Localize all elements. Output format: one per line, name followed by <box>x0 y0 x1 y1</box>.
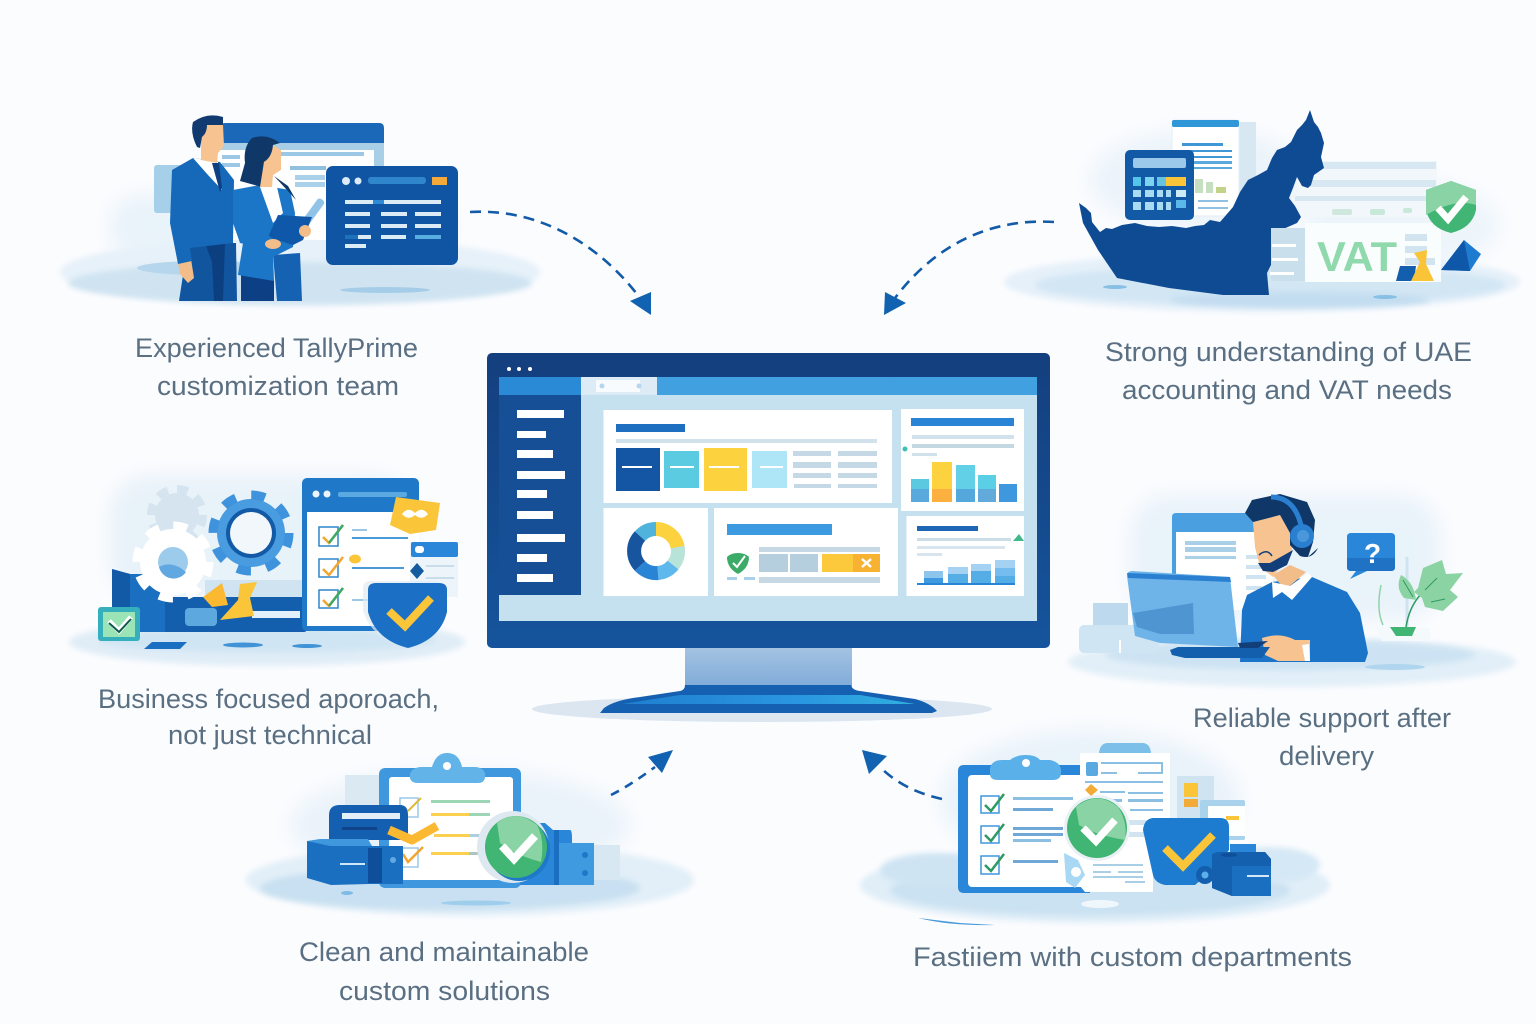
caption: clean <box>299 937 589 1006</box>
monitor frame <box>487 353 1050 648</box>
icon: green check circle <box>477 811 550 883</box>
icon: yellow shards <box>203 582 257 620</box>
wash: departments ground <box>860 730 1330 925</box>
icon: faded document <box>1295 161 1437 217</box>
icon: right storage boxes <box>520 823 594 885</box>
icon: white gear <box>137 526 209 598</box>
icon: businesswoman <box>233 136 325 301</box>
caption: UAE: Strong understanding of UAE <box>1105 337 1472 367</box>
arrow: UAE to monitor <box>884 222 1054 315</box>
icon: question bubble: ? <box>1364 538 1381 569</box>
caption: team <box>135 333 418 401</box>
panel: reliable support <box>1068 494 1516 687</box>
caption: team: customization team <box>157 371 399 401</box>
sidebar <box>499 395 581 595</box>
icon: report sheet <box>1172 120 1256 216</box>
caption: support <box>1193 703 1451 771</box>
icon: check badge <box>1143 818 1229 885</box>
caption: clean: custom solutions <box>339 976 550 1006</box>
icon: blue gem <box>1441 240 1481 271</box>
icon: yellow tag <box>390 497 440 534</box>
panel: business focused <box>69 475 465 666</box>
arrow: team to monitor <box>470 212 651 315</box>
title bar <box>499 377 1037 395</box>
icon: left printer stack <box>307 805 408 885</box>
caption: UAE: accounting and VAT needs <box>1122 375 1452 405</box>
wash: clean ground <box>246 770 694 916</box>
screen <box>499 377 1037 621</box>
desk bar <box>160 597 307 632</box>
icon: plant <box>1375 557 1463 641</box>
icon: UAE map <box>1079 110 1324 295</box>
caption: departments: Fastiiem with custom departments <box>913 942 1352 972</box>
icon: shield <box>363 581 447 648</box>
panel: UAE VAT <box>1004 110 1520 312</box>
icon: dashboard card <box>326 166 458 265</box>
panel: clean solutions <box>246 753 694 916</box>
stand neck <box>685 647 852 687</box>
caption: team: Experienced TallyPrime <box>135 333 418 363</box>
icon: green check circle <box>1064 795 1130 861</box>
card: KPI tiles <box>604 410 892 503</box>
icon: side boxes <box>1079 603 1159 653</box>
arrow: departments to monitor <box>862 750 942 799</box>
caption: business <box>98 684 439 750</box>
window dots <box>507 367 532 371</box>
caption: business: Business focused aporoach, <box>98 684 439 714</box>
icon: clipboard <box>379 753 521 888</box>
icon: checklist clipboard <box>958 755 1090 893</box>
icon: back window <box>1172 513 1273 610</box>
shadow under stand <box>532 696 992 722</box>
ground marks <box>144 642 322 649</box>
icon: VAT document: VAT <box>1317 233 1397 280</box>
card: stacked bars <box>906 516 1024 596</box>
icon: calculator <box>1125 150 1194 220</box>
wash: UAE ground <box>1004 130 1520 312</box>
cube <box>112 569 165 632</box>
wash: business ground <box>69 475 465 666</box>
panel: experienced team <box>60 115 540 306</box>
icon: report document <box>1080 743 1170 858</box>
card: status table <box>714 508 898 596</box>
icon: question bubble <box>1347 533 1395 579</box>
icon: back window <box>154 123 384 240</box>
icon: check tile <box>98 607 140 641</box>
caption: support: Reliable support after <box>1193 703 1451 733</box>
caption: business: not just technical <box>168 720 372 750</box>
icon: yellow check <box>389 826 437 840</box>
icon: green check badge <box>1426 181 1476 233</box>
icon: blue box <box>1212 844 1271 896</box>
icon: small side docs <box>1177 776 1245 840</box>
icon: pale gear <box>151 489 203 541</box>
icon: support agent <box>1240 494 1368 662</box>
card: donut chart <box>604 508 708 596</box>
wash: team ground <box>60 195 540 306</box>
caption: support: delivery <box>1279 741 1374 771</box>
icon: yellow weight <box>1396 250 1434 281</box>
icon: checklist window <box>302 478 419 631</box>
wash: support ground <box>1068 495 1516 687</box>
icon: ticket card <box>1064 853 1153 892</box>
panel: custom departments <box>860 730 1330 925</box>
caption: UAE <box>1105 337 1472 405</box>
icon: blue gear <box>213 495 289 571</box>
stand base <box>600 685 937 713</box>
icon: VAT document <box>1270 223 1441 282</box>
icon: businessman <box>170 115 237 301</box>
icon: laptop <box>1127 571 1270 658</box>
icon: small side doc <box>410 542 458 597</box>
arrow: clean to monitor <box>611 750 673 795</box>
card: bar chart <box>901 409 1024 511</box>
caption: clean: Clean and maintainable <box>299 937 589 967</box>
panel: central monitor <box>487 353 1050 722</box>
